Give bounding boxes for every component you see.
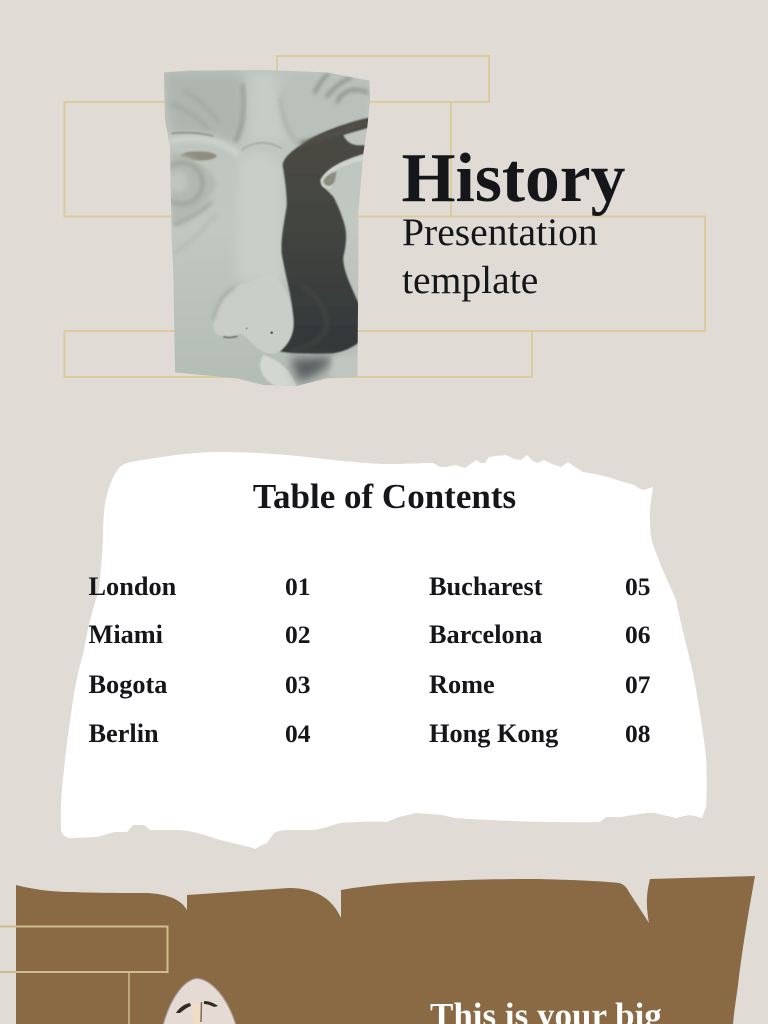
forehead centre — [254, 76, 277, 134]
left brow — [166, 73, 241, 140]
right column entries: 08 — [625, 719, 650, 748]
left column entries: Bogota — [88, 670, 167, 699]
subtitle: template — [402, 258, 538, 302]
left column entries: Miami — [88, 620, 163, 649]
left column entries: 02 — [285, 620, 310, 649]
title: History — [402, 140, 626, 217]
right column entries: Barcelona — [429, 620, 542, 649]
torn white paper shape — [61, 452, 707, 849]
panel: table of contents — [61, 452, 707, 849]
right column entries: Rome — [429, 670, 495, 699]
nose tip — [214, 281, 294, 354]
decorative outlined rectangles: brown section — [0, 926, 168, 1024]
right brow — [280, 72, 369, 143]
left column entries: Berlin — [88, 719, 159, 748]
right eye — [321, 155, 365, 188]
right column entries: 05 — [625, 572, 650, 601]
right column entries: Bucharest — [429, 572, 543, 601]
left column entries: 03 — [285, 670, 310, 699]
panel: brown torn section — [16, 876, 755, 1024]
right column entries: 07 — [625, 670, 651, 699]
heading: Table of Contents — [253, 477, 516, 516]
image: sculpture face close-up — [160, 67, 373, 390]
right column entries: Hong Kong — [429, 719, 558, 748]
left column entries: London — [88, 572, 177, 601]
right column entries: 06 — [625, 620, 650, 649]
nose bridge highlight — [239, 156, 281, 278]
left column entries — [88, 572, 311, 748]
left column entries: 04 — [285, 719, 311, 748]
furrow between brows — [242, 143, 282, 150]
upper lip and lower face — [260, 355, 297, 387]
decorative outlined rectangles: header — [64, 56, 705, 377]
shadow side of face — [280, 117, 370, 354]
left column entries: 01 — [285, 572, 310, 601]
right column entries — [429, 572, 651, 748]
image: upturned sculpture head — [163, 978, 236, 1024]
subtitle: Presentation — [402, 210, 598, 254]
left eye — [170, 138, 238, 155]
